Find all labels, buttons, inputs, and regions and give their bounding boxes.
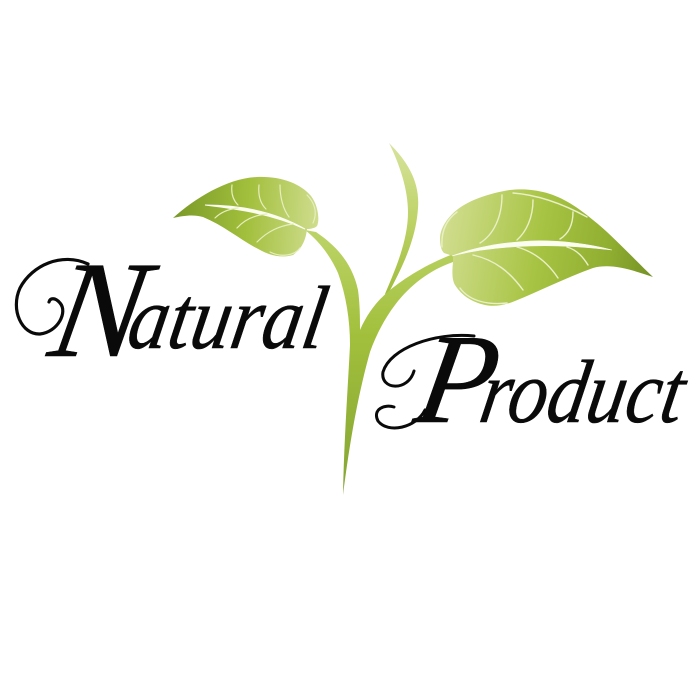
center shoot [385, 143, 418, 296]
left leaf midrib [205, 205, 305, 229]
letter N: N [39, 234, 167, 387]
right leaf midrib [452, 241, 612, 256]
stem [305, 230, 453, 495]
right leaf [440, 189, 653, 306]
letter P: P [406, 308, 510, 450]
right leaf veins [442, 193, 588, 304]
N flourish [16, 259, 88, 334]
P flourish [376, 335, 474, 428]
left leaf [173, 177, 318, 256]
letters atural: atural [122, 268, 335, 368]
wordmark: Natural [16, 234, 335, 387]
plant [173, 143, 653, 495]
wordmark: Product [376, 308, 696, 450]
left leaf veins [215, 185, 315, 255]
